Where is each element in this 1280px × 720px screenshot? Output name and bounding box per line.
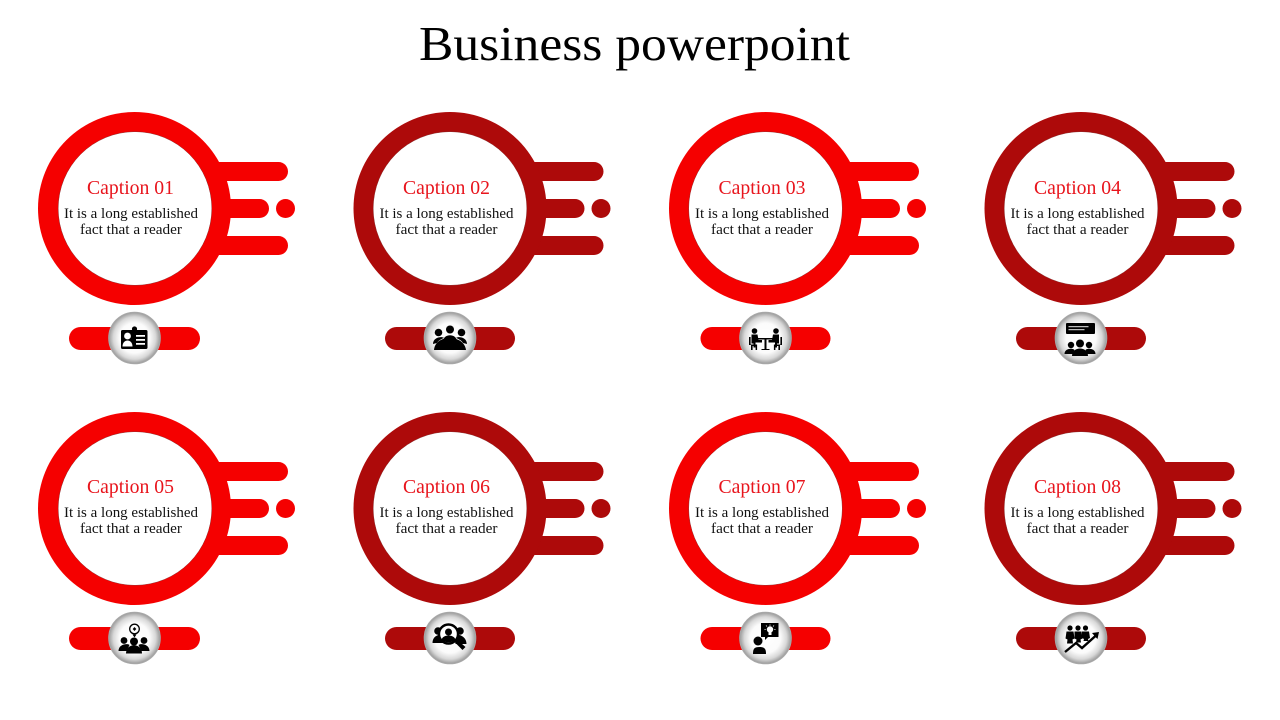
ring with bars bbox=[38, 112, 288, 305]
caption text: It is a long established bbox=[1010, 505, 1145, 521]
icon badge: team meeting bbox=[424, 312, 476, 364]
caption text: fact that a reader bbox=[396, 521, 498, 537]
caption text: fact that a reader bbox=[80, 521, 182, 537]
inner circle bbox=[1004, 432, 1158, 585]
caption text: It is a long established bbox=[380, 505, 514, 521]
icon badge: two people at table bbox=[740, 312, 791, 364]
caption text: fact that a reader bbox=[711, 222, 813, 238]
inner circle bbox=[373, 432, 527, 585]
ring with bars bbox=[354, 412, 604, 605]
card: caption 04 bbox=[984, 112, 1242, 364]
inner circle bbox=[689, 432, 842, 585]
caption heading: Caption 07 bbox=[718, 476, 806, 498]
card: caption 08 bbox=[984, 412, 1242, 664]
ring with bars bbox=[354, 112, 604, 305]
card: caption 07 bbox=[669, 412, 926, 664]
caption heading: Caption 02 bbox=[403, 177, 490, 199]
ring with bars bbox=[669, 112, 919, 305]
icon badge: presentation audience bbox=[1055, 312, 1107, 364]
dot bbox=[907, 199, 926, 218]
caption heading: Caption 05 bbox=[87, 476, 174, 498]
icon badge: team growth arrow bbox=[1055, 612, 1107, 664]
caption text: It is a long established bbox=[1010, 206, 1145, 222]
dot bbox=[1222, 199, 1242, 218]
caption text: fact that a reader bbox=[396, 222, 498, 238]
caption text: fact that a reader bbox=[1026, 521, 1129, 537]
pill bbox=[69, 627, 200, 650]
pill bbox=[700, 627, 830, 650]
pill bbox=[1016, 627, 1146, 650]
card: caption 05 bbox=[38, 412, 295, 664]
caption text: fact that a reader bbox=[711, 521, 813, 537]
pill bbox=[1016, 327, 1146, 350]
dot bbox=[592, 499, 610, 518]
icon badge: id card bbox=[109, 312, 160, 364]
icon badge: people search bbox=[424, 612, 476, 664]
caption text: It is a long established bbox=[64, 206, 199, 222]
caption text: It is a long established bbox=[695, 505, 830, 521]
caption heading: Caption 04 bbox=[1034, 177, 1121, 199]
inner circle bbox=[58, 432, 212, 585]
pill bbox=[69, 327, 200, 350]
dot bbox=[276, 199, 295, 218]
card: caption 02 bbox=[354, 112, 610, 364]
card: caption 01 bbox=[38, 112, 295, 364]
ring with bars bbox=[38, 412, 288, 605]
inner circle bbox=[373, 132, 527, 285]
caption heading: Caption 06 bbox=[403, 476, 490, 498]
caption heading: Caption 08 bbox=[1034, 476, 1121, 498]
pill bbox=[385, 627, 515, 650]
card: caption 06 bbox=[354, 412, 610, 664]
inner circle bbox=[689, 132, 842, 285]
caption text: It is a long established bbox=[380, 206, 514, 222]
icon badge: person with idea bubble bbox=[740, 612, 791, 664]
dot bbox=[276, 499, 295, 518]
caption text: It is a long established bbox=[695, 206, 830, 222]
title: Business powerpoint bbox=[419, 16, 850, 71]
caption heading: Caption 03 bbox=[718, 177, 806, 199]
caption text: fact that a reader bbox=[80, 222, 182, 238]
ring with bars bbox=[984, 112, 1234, 305]
inner circle bbox=[1004, 132, 1158, 285]
pill bbox=[385, 327, 515, 350]
dot bbox=[592, 199, 610, 218]
caption text: fact that a reader bbox=[1026, 222, 1129, 238]
pill bbox=[700, 327, 830, 350]
inner circle bbox=[58, 132, 212, 285]
ring with bars bbox=[669, 412, 919, 605]
card: caption 03 bbox=[669, 112, 926, 364]
caption heading: Caption 01 bbox=[87, 177, 174, 199]
dot bbox=[1222, 499, 1242, 518]
icon badge: team idea bbox=[109, 612, 160, 664]
caption text: It is a long established bbox=[64, 505, 199, 521]
ring with bars bbox=[984, 412, 1234, 605]
dot bbox=[907, 499, 926, 518]
